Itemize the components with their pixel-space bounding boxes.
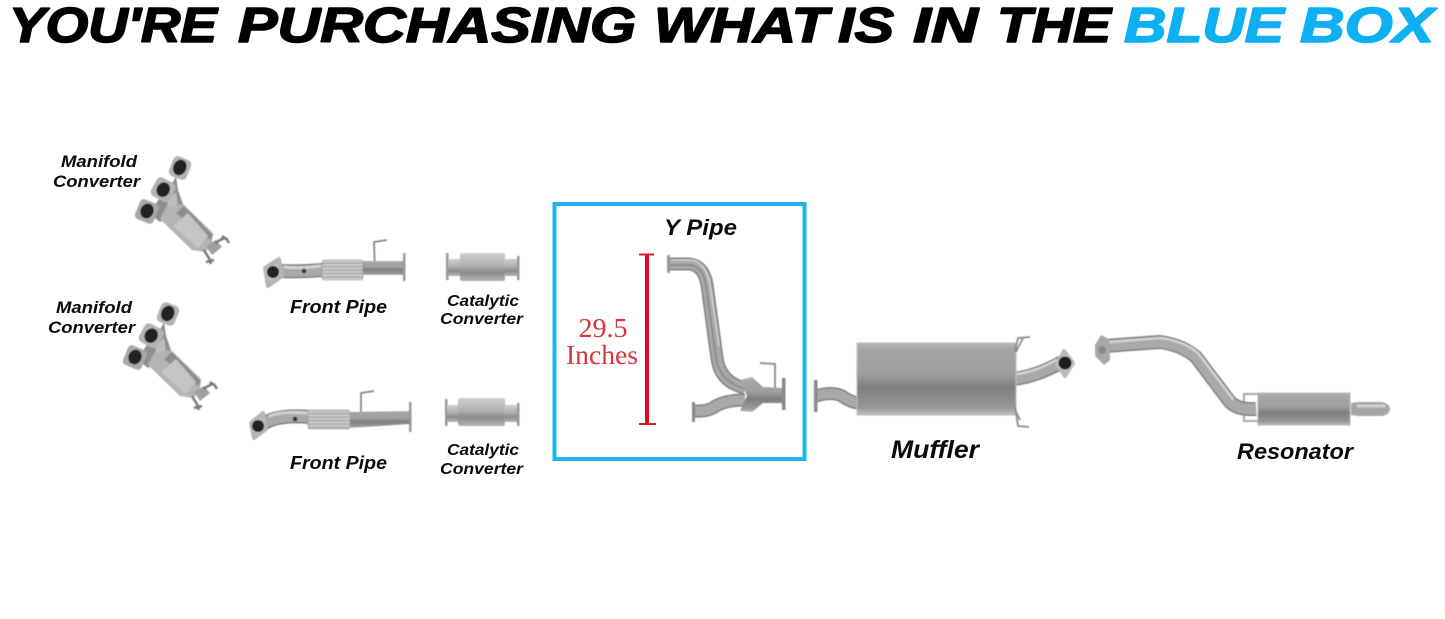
title: THE bbox=[997, 0, 1113, 53]
label: catalytic converter top: Catalytic bbox=[447, 293, 519, 310]
label: catalytic converter bottom: Catalytic bbox=[447, 442, 519, 459]
title: BLUE bbox=[1124, 0, 1286, 53]
label: manifold converter top bbox=[53, 153, 142, 191]
panel: blue box bbox=[554, 204, 804, 459]
title: WHAT bbox=[654, 0, 833, 53]
label: front pipe top: Front Pipe bbox=[290, 297, 387, 317]
label: catalytic converter top bbox=[440, 293, 524, 328]
label: manifold converter top: Manifold bbox=[61, 153, 138, 171]
title: IS bbox=[838, 0, 894, 53]
title: PURCHASING bbox=[238, 0, 636, 53]
label: y pipe: Y Pipe bbox=[664, 215, 737, 240]
icon: front pipe top bbox=[265, 240, 406, 286]
icon: manifold converter top bbox=[134, 155, 229, 264]
label: manifold converter bottom: Manifold bbox=[56, 299, 133, 317]
dimension bar bbox=[639, 254, 656, 425]
label: manifold converter bottom bbox=[48, 299, 137, 337]
icon: y pipe bbox=[667, 255, 786, 422]
icon: manifold converter bottom bbox=[122, 301, 217, 410]
label: front pipe bottom: Front Pipe bbox=[290, 453, 387, 473]
title bbox=[9, 0, 1438, 53]
title: IN bbox=[913, 0, 980, 53]
icon: catalytic converter top bbox=[446, 253, 520, 281]
title: BOX bbox=[1300, 0, 1438, 53]
title: YOU'RE bbox=[9, 0, 218, 53]
label: resonator: Resonator bbox=[1237, 439, 1355, 464]
dimension label bbox=[566, 313, 638, 370]
label: catalytic converter bottom bbox=[440, 442, 524, 478]
dimension label: Inches bbox=[566, 340, 638, 370]
label: manifold converter top: Converter bbox=[53, 173, 142, 191]
label: catalytic converter bottom: Converter bbox=[440, 461, 524, 478]
label: catalytic converter top: Converter bbox=[440, 311, 524, 328]
label: manifold converter bottom: Converter bbox=[48, 319, 137, 337]
dimension label: 29.5 bbox=[578, 313, 628, 343]
icon: catalytic converter bottom bbox=[445, 398, 520, 426]
icon: front pipe bottom bbox=[251, 391, 412, 438]
label: muffler: Muffler bbox=[891, 436, 980, 464]
icon: muffler bbox=[814, 337, 1073, 427]
icon: resonator bbox=[1095, 335, 1390, 425]
